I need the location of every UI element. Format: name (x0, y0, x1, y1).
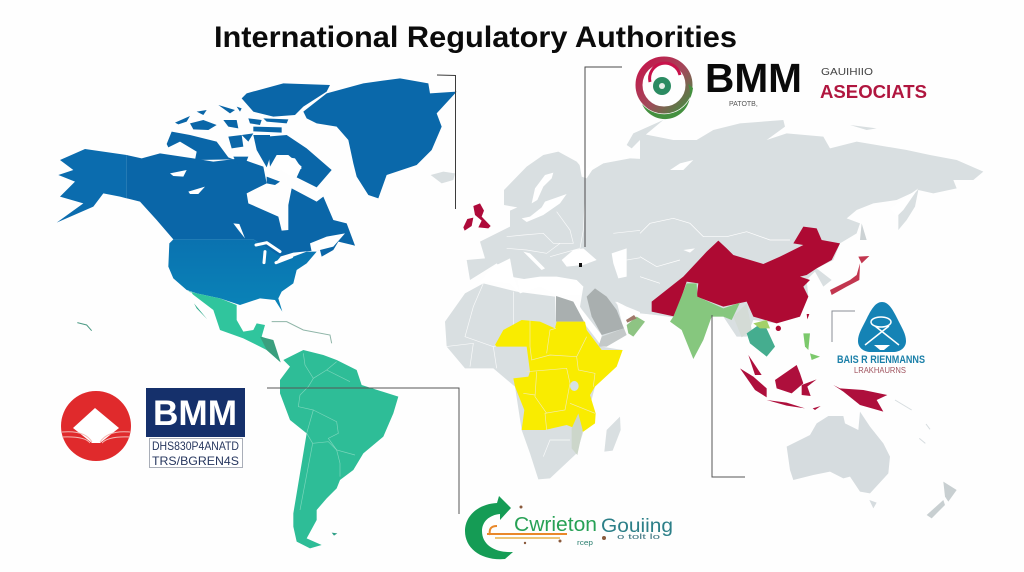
logo small text center: rcep (577, 540, 593, 547)
New Zealand (927, 482, 957, 518)
country borders (445, 200, 690, 457)
caption box: DHS830P4ANATD (152, 439, 239, 453)
lakes and inlets (170, 156, 345, 252)
lake (570, 381, 579, 391)
icon: red circle with diamond (61, 391, 131, 461)
logo: right teal triangle (837, 302, 925, 375)
Oman and Somalia patch (627, 317, 645, 337)
logo secondary text: GAUIHIIO (821, 67, 873, 78)
Pacific islands (895, 400, 930, 443)
logo wordmark: BMM (705, 55, 802, 101)
Thailand and Vietnam (747, 322, 775, 357)
title: International Regulatory Authorities (214, 21, 737, 54)
Indonesia and Malaysia (740, 355, 887, 412)
icon: rounded triangle (858, 302, 906, 352)
callout line: South America (267, 388, 459, 514)
Mozambique strip (572, 413, 583, 455)
African inner borders (523, 320, 595, 430)
Canada (127, 83, 355, 257)
map: South America (280, 350, 398, 548)
icon: green C arrow (465, 496, 567, 559)
logo: left red circle BMM (61, 388, 245, 468)
BMM navy box (146, 388, 245, 437)
caption box: TRS/BGREN4S (152, 454, 239, 468)
logo: top right BMM Associates (639, 55, 927, 119)
map: North America (57, 78, 457, 362)
icon: spiral ring (639, 60, 693, 119)
South America borders (298, 353, 355, 510)
logo wordmark green: Cwrieton (514, 514, 597, 536)
Australia (787, 412, 890, 493)
Central Asia borders (640, 218, 790, 283)
Philippines (803, 333, 820, 360)
logo small text: o tolt lo (617, 534, 660, 541)
Egypt and Arabia shaded (556, 288, 624, 335)
USA (168, 239, 317, 312)
Europe and western Asia (467, 140, 693, 347)
caption box (150, 438, 242, 468)
Mexico and Central America (188, 291, 281, 362)
UK and Ireland (463, 203, 491, 231)
seas (478, 163, 633, 346)
India (670, 283, 740, 359)
Great Lakes (256, 243, 292, 263)
map: Southeast Asia and Oceania (740, 355, 957, 518)
Alaska (57, 149, 127, 223)
callout line: Greenland to UK (437, 75, 456, 209)
Novaya Zemlya (627, 120, 663, 148)
map: Europe, Africa, West Asia (431, 120, 693, 479)
Greenland (303, 78, 457, 198)
logo associates text: ASEOCIATS (820, 82, 927, 102)
Iceland (431, 172, 455, 183)
callout line: India (712, 315, 745, 477)
Madagascar (604, 417, 621, 452)
Sakhalin (860, 223, 867, 240)
Japan (830, 256, 869, 295)
logo wordmark teal: Gouiing (601, 516, 673, 537)
callout marker (579, 263, 582, 267)
BMM navy box: BMM (153, 394, 237, 433)
Central and East Africa highlighted (495, 320, 623, 432)
Hainan and Taiwan (776, 326, 781, 331)
logo subname: LRAKHAURNS (854, 366, 906, 375)
logo name: BAIS R RIENMANNS (837, 354, 925, 366)
map: Asia (640, 120, 983, 360)
Caribbean and Hawaii (77, 322, 332, 343)
China and Pakistan (652, 227, 840, 323)
Tasmania (869, 500, 877, 508)
callout line: Southeast Asia logo (832, 311, 855, 342)
Arctic islands (850, 125, 877, 130)
Kamchatka (898, 190, 918, 230)
callout line: top right logo (585, 67, 622, 247)
Myanmar (733, 303, 752, 337)
Arctic inlet (670, 160, 693, 170)
logo: bottom green C (465, 496, 673, 559)
Russia and East Asia (640, 120, 983, 337)
Africa (445, 283, 623, 479)
logo caption: PATOTB, (729, 101, 758, 108)
logo specks (520, 506, 606, 544)
